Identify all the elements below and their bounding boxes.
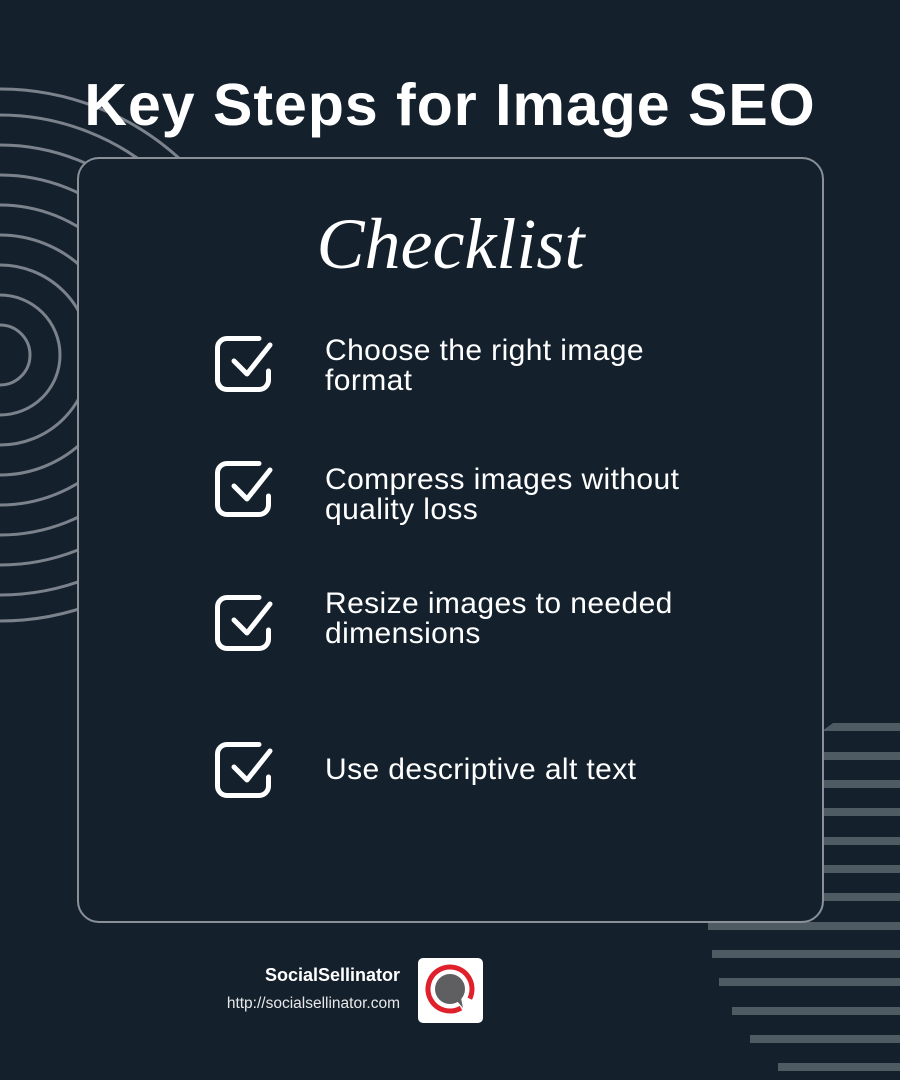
footer brand text: SocialSellinator <box>265 965 400 985</box>
logo <box>418 958 483 1023</box>
item 3: dimensions <box>325 617 481 650</box>
item 4 <box>215 742 636 798</box>
icon: checkbox <box>215 461 272 517</box>
item 3: Resize images to needed <box>325 587 673 620</box>
icon: checkbox <box>215 742 272 798</box>
footer brand text: http://socialsellinator.com <box>227 995 400 1012</box>
item 1 <box>215 334 644 397</box>
heading: Checklist: Checklist <box>317 204 584 284</box>
item 2: quality loss <box>325 493 478 526</box>
panel: checklist <box>77 157 824 923</box>
item 2 <box>215 461 679 526</box>
item 1: Choose the right image <box>325 334 644 367</box>
icon: checkbox <box>215 336 272 392</box>
item 4: Use descriptive alt text <box>325 753 636 786</box>
item 1: format <box>325 364 412 397</box>
item 2: Compress images without <box>325 463 679 496</box>
item 3 <box>215 587 673 651</box>
footer brand text <box>227 965 400 1012</box>
icon: checkbox <box>215 595 272 651</box>
title: Key Steps for Image SEO <box>84 72 816 138</box>
